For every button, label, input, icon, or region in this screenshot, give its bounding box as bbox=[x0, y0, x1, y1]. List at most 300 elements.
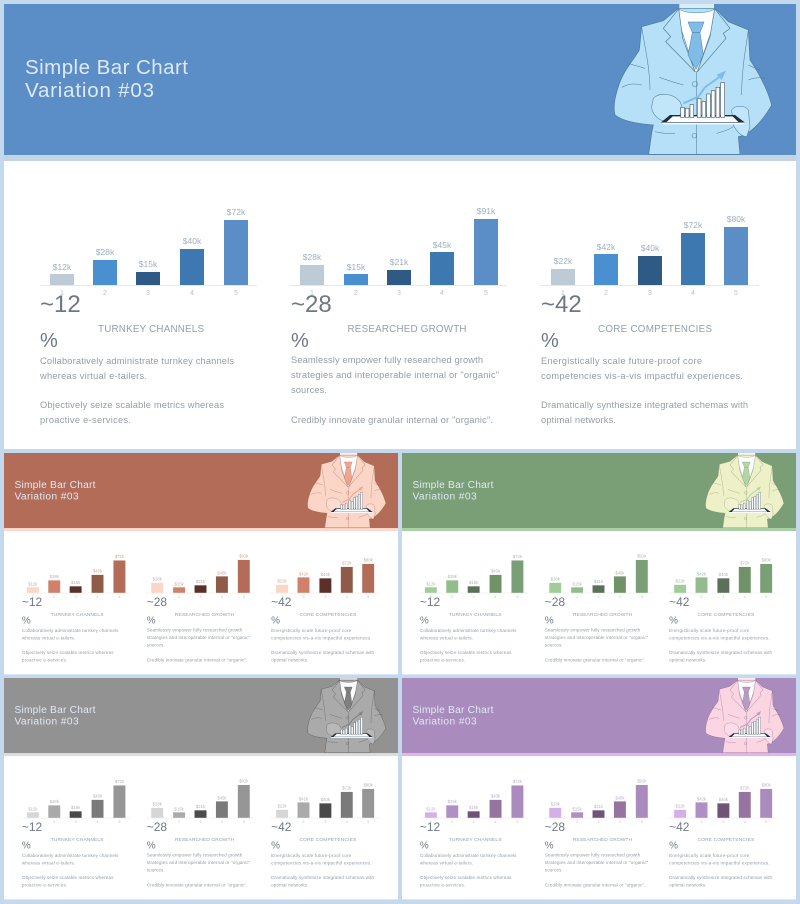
stat bbox=[291, 291, 332, 352]
bar chart: 3 bbox=[200, 820, 202, 824]
header banner bbox=[402, 453, 796, 528]
bar chart: $28k bbox=[50, 574, 60, 579]
bar chart: 3 bbox=[598, 595, 600, 599]
column: turnkey channels bbox=[39, 207, 257, 425]
content background bbox=[4, 756, 398, 899]
title: Simple Bar Chart bbox=[14, 705, 96, 716]
bar chart: $15k bbox=[175, 806, 185, 811]
bar chart: $15k bbox=[469, 805, 479, 810]
bar chart: 4 bbox=[619, 595, 621, 599]
bar chart: $40k bbox=[491, 793, 501, 798]
heading: RESEARCHED GROWTH bbox=[348, 324, 466, 335]
bar chart: $40k bbox=[321, 797, 331, 802]
bar chart: 1 bbox=[60, 290, 64, 297]
bar chart: 4 bbox=[691, 290, 695, 297]
stat bbox=[420, 595, 441, 627]
bar chart: $12k bbox=[28, 806, 38, 811]
bar chart: $15k bbox=[573, 581, 583, 586]
text block: Credibly innovate granular internal or "organic". bbox=[545, 882, 645, 887]
text block: Credibly innovate granular internal or "organic". bbox=[147, 657, 247, 662]
title bbox=[412, 480, 494, 502]
text block: optimal networks. bbox=[271, 657, 308, 662]
text block bbox=[147, 853, 251, 887]
text block: sources. bbox=[147, 868, 165, 873]
text block: sources. bbox=[545, 643, 563, 648]
header banner bbox=[402, 678, 796, 753]
bar chart: 3 bbox=[75, 820, 77, 824]
text block: Credibly innovate granular internal or "organic". bbox=[545, 657, 645, 662]
text block: Dramatically synthesize integrated schemas with bbox=[669, 875, 773, 880]
heading: TURNKEY CHANNELS bbox=[51, 612, 104, 618]
bar chart: $22k bbox=[278, 803, 288, 808]
bar chart: 3 bbox=[397, 290, 401, 297]
bar chart: 1 bbox=[32, 595, 34, 599]
text block: sources. bbox=[545, 868, 563, 873]
column: core competencies bbox=[271, 557, 380, 662]
bar chart: $91k bbox=[637, 553, 647, 558]
text block: Credibly innovate granular internal or "organic". bbox=[291, 415, 493, 425]
text block: competencies vis-a-vis impactful experiences. bbox=[541, 371, 743, 381]
text block: sources. bbox=[291, 385, 327, 395]
bar chart: 2 bbox=[178, 595, 180, 599]
bar chart: 3 bbox=[324, 595, 326, 599]
bar chart bbox=[669, 557, 778, 599]
bar chart: $91k bbox=[239, 778, 249, 783]
bar chart: 2 bbox=[53, 595, 55, 599]
stat bbox=[147, 820, 167, 852]
bar chart: 1 bbox=[679, 820, 681, 824]
icon: businessman holding tablet chart bbox=[706, 678, 784, 753]
text block bbox=[39, 356, 234, 425]
bar chart: 3 bbox=[473, 820, 475, 824]
text block: proactive e-services. bbox=[420, 882, 465, 887]
heading: RESEARCHED GROWTH bbox=[175, 837, 235, 843]
text block: Seamlessly empower fully researched growth bbox=[147, 853, 243, 858]
bar chart: $28k bbox=[50, 799, 60, 804]
bar chart: 4 bbox=[495, 595, 497, 599]
stat: ~12 bbox=[40, 291, 81, 318]
bar chart: $22k bbox=[554, 256, 573, 266]
column: core competencies bbox=[540, 214, 759, 425]
bar chart: 2 bbox=[604, 290, 608, 297]
bar chart: 2 bbox=[303, 595, 305, 599]
header strip bbox=[402, 753, 796, 756]
bar chart: 2 bbox=[53, 820, 55, 824]
bar chart bbox=[290, 206, 507, 297]
bar chart: $12k bbox=[53, 262, 72, 272]
text block: competencies vis-a-vis impactful experiences. bbox=[669, 861, 770, 866]
bar chart bbox=[544, 778, 652, 824]
column: core competencies bbox=[271, 782, 380, 887]
text block: Seamlessly empower fully researched growth bbox=[545, 628, 641, 633]
content background bbox=[402, 756, 796, 899]
bar chart: $15k bbox=[139, 259, 158, 269]
text block bbox=[420, 628, 517, 662]
text block: Energistically scale future-proof core bbox=[669, 853, 750, 858]
bar chart: $15k bbox=[175, 581, 185, 586]
text block bbox=[669, 853, 773, 887]
bar chart: 1 bbox=[281, 595, 283, 599]
column: turnkey channels bbox=[22, 554, 130, 662]
header banner bbox=[4, 678, 398, 753]
stat: ~42 bbox=[669, 820, 690, 834]
bar chart: $42k bbox=[299, 571, 309, 576]
title: Simple Bar Chart bbox=[25, 56, 188, 79]
heading: RESEARCHED GROWTH bbox=[573, 612, 633, 618]
bar chart: $80k bbox=[364, 782, 374, 787]
bar chart: $40k bbox=[641, 243, 660, 253]
bar chart: $72k bbox=[684, 220, 703, 230]
bar chart: $42k bbox=[597, 242, 616, 252]
text block: Dramatically synthesize integrated schemas with bbox=[669, 650, 773, 655]
column: turnkey channels bbox=[420, 779, 528, 887]
bar chart: $12k bbox=[28, 581, 38, 586]
bar chart: $40k bbox=[719, 572, 729, 577]
title: Variation #03 bbox=[14, 716, 79, 727]
stat bbox=[271, 820, 292, 852]
text block: strategies and interoperable internal or "organic" bbox=[545, 860, 649, 865]
bar chart: 5 bbox=[516, 820, 518, 824]
stat bbox=[541, 291, 582, 352]
bar chart: 1 bbox=[679, 595, 681, 599]
heading: TURNKEY CHANNELS bbox=[449, 612, 502, 618]
bar chart: 4 bbox=[97, 595, 99, 599]
text block: competencies vis-a-vis impactful experiences. bbox=[271, 636, 372, 641]
bar chart: 1 bbox=[430, 595, 432, 599]
text block bbox=[545, 628, 649, 662]
column: core competencies bbox=[669, 557, 778, 662]
text block bbox=[545, 853, 649, 887]
bar chart: $28k bbox=[551, 576, 561, 581]
bar chart: $72k bbox=[342, 560, 352, 565]
stat: ~28 bbox=[545, 820, 565, 834]
bar chart: $21k bbox=[196, 804, 206, 809]
text block: Energistically scale future-proof core bbox=[271, 853, 352, 858]
bar chart bbox=[669, 782, 778, 824]
bar chart bbox=[146, 778, 254, 824]
text block: Collaboratively administrate turnkey channels bbox=[22, 853, 119, 858]
text block bbox=[271, 853, 375, 887]
bar chart: $28k bbox=[551, 801, 561, 806]
bar chart: $45k bbox=[433, 240, 452, 250]
text block bbox=[541, 356, 748, 425]
bar chart: 1 bbox=[554, 820, 556, 824]
bar chart: $80k bbox=[364, 557, 374, 562]
bar chart: $72k bbox=[342, 785, 352, 790]
stat: ~28 bbox=[545, 595, 565, 609]
bar chart: $72k bbox=[513, 554, 523, 559]
text block bbox=[22, 853, 119, 887]
text block: optimal networks. bbox=[271, 882, 308, 887]
text block: proactive e-services. bbox=[22, 882, 67, 887]
bar chart: $21k bbox=[594, 804, 604, 809]
heading: TURNKEY CHANNELS bbox=[98, 324, 204, 335]
bar chart: $15k bbox=[573, 806, 583, 811]
heading: TURNKEY CHANNELS bbox=[449, 837, 502, 843]
title bbox=[412, 705, 494, 727]
bar chart: 3 bbox=[722, 595, 724, 599]
bar chart: 4 bbox=[221, 820, 223, 824]
text block: strategies and interoperable internal or "organic" bbox=[545, 635, 649, 640]
column: turnkey channels bbox=[420, 554, 528, 662]
bar chart: 5 bbox=[234, 290, 238, 297]
bar chart: 4 bbox=[495, 820, 497, 824]
heading: TURNKEY CHANNELS bbox=[51, 837, 104, 843]
bar chart bbox=[146, 553, 254, 599]
text block bbox=[22, 628, 119, 662]
bar chart: 5 bbox=[765, 595, 767, 599]
bar chart: $80k bbox=[762, 782, 772, 787]
bar chart: $72k bbox=[740, 560, 750, 565]
stat: % bbox=[420, 841, 429, 852]
bar chart: 1 bbox=[156, 595, 158, 599]
stat: % bbox=[40, 330, 58, 352]
text block: competencies vis-a-vis impactful experiences. bbox=[669, 636, 770, 641]
bar chart: 3 bbox=[75, 595, 77, 599]
bar chart: $72k bbox=[115, 779, 125, 784]
bar chart: 2 bbox=[103, 290, 107, 297]
title: Simple Bar Chart bbox=[412, 480, 494, 491]
stat: ~28 bbox=[147, 595, 167, 609]
text block: Credibly innovate granular internal or "organic". bbox=[147, 882, 247, 887]
text block: whereas virtual e-tailers. bbox=[420, 861, 473, 866]
stat: ~42 bbox=[271, 595, 292, 609]
bar chart: 4 bbox=[440, 290, 444, 297]
stat bbox=[669, 820, 690, 852]
bar chart bbox=[544, 553, 652, 599]
stat: ~28 bbox=[291, 291, 332, 318]
column: researched growth bbox=[146, 778, 254, 887]
bar chart: $28k bbox=[448, 799, 458, 804]
icon: businessman holding tablet chart bbox=[308, 678, 386, 753]
bar chart: $45k bbox=[615, 795, 625, 800]
stat: % bbox=[669, 841, 678, 852]
stat bbox=[420, 820, 441, 852]
bar chart: 1 bbox=[554, 595, 556, 599]
bar chart: 1 bbox=[32, 820, 34, 824]
bar chart: $15k bbox=[347, 262, 366, 272]
bar chart bbox=[22, 554, 130, 599]
title bbox=[14, 480, 96, 502]
heading: CORE COMPETENCIES bbox=[698, 612, 755, 618]
bar chart: $72k bbox=[513, 779, 523, 784]
bar chart: $12k bbox=[426, 581, 436, 586]
bar chart: 3 bbox=[146, 290, 150, 297]
bar chart: 4 bbox=[97, 820, 99, 824]
text block: Seamlessly empower fully researched growth bbox=[291, 355, 483, 365]
bar chart: $40k bbox=[491, 568, 501, 573]
column: turnkey channels bbox=[22, 779, 130, 887]
header strip bbox=[4, 155, 796, 161]
header banner bbox=[4, 453, 398, 528]
text block: strategies and interoperable internal or "organic" bbox=[147, 635, 251, 640]
heading: RESEARCHED GROWTH bbox=[573, 837, 633, 843]
bar chart: $28k bbox=[303, 252, 322, 262]
column: core competencies bbox=[669, 782, 778, 887]
bar chart: 2 bbox=[354, 290, 358, 297]
bar chart: 1 bbox=[430, 820, 432, 824]
bar chart: 5 bbox=[516, 595, 518, 599]
bar chart: 2 bbox=[701, 595, 703, 599]
stat bbox=[669, 595, 690, 627]
bar chart: 4 bbox=[346, 820, 348, 824]
text block: Collaboratively administrate turnkey channels bbox=[420, 628, 517, 633]
header strip bbox=[402, 528, 796, 531]
panel: blue main slide bbox=[4, 4, 796, 449]
bar chart: 3 bbox=[200, 595, 202, 599]
content background bbox=[4, 161, 796, 449]
bar chart: 4 bbox=[221, 595, 223, 599]
stat: % bbox=[545, 616, 554, 627]
heading: RESEARCHED GROWTH bbox=[175, 612, 235, 618]
panel: green variation bbox=[402, 453, 796, 674]
text block bbox=[147, 628, 251, 662]
header banner bbox=[4, 4, 796, 155]
bar chart: 4 bbox=[744, 820, 746, 824]
bar chart: 5 bbox=[118, 595, 120, 599]
bar chart: 5 bbox=[641, 820, 643, 824]
text block: strategies and interoperable internal or "organic" bbox=[147, 860, 251, 865]
text block: whereas virtual e-tailers. bbox=[22, 861, 75, 866]
stat: ~12 bbox=[22, 595, 43, 609]
text block: optimal networks. bbox=[669, 657, 706, 662]
stat: % bbox=[271, 616, 280, 627]
bar chart: 5 bbox=[367, 820, 369, 824]
bar chart: 2 bbox=[303, 820, 305, 824]
stat: % bbox=[147, 616, 156, 627]
bar chart: $22k bbox=[278, 578, 288, 583]
bar chart: 5 bbox=[118, 820, 120, 824]
text block: Objectively seize scalable metrics whereas bbox=[420, 875, 512, 880]
title: Variation #03 bbox=[25, 79, 154, 102]
bar chart: $15k bbox=[71, 805, 81, 810]
bar chart: $22k bbox=[676, 803, 686, 808]
stat bbox=[22, 595, 43, 627]
bar chart: $21k bbox=[196, 579, 206, 584]
bar chart: $21k bbox=[594, 579, 604, 584]
text block: proactive e-services. bbox=[22, 657, 67, 662]
text block bbox=[291, 355, 499, 425]
text block: optimal networks. bbox=[541, 415, 616, 425]
bar chart bbox=[40, 207, 257, 297]
bar chart: $22k bbox=[676, 578, 686, 583]
bar chart: $21k bbox=[390, 257, 409, 267]
column: researched growth bbox=[544, 778, 652, 887]
panel: purple variation bbox=[402, 678, 796, 899]
text block: Objectively seize scalable metrics whereas bbox=[22, 650, 114, 655]
text block: proactive e-services. bbox=[40, 415, 131, 425]
bar chart: $42k bbox=[299, 796, 309, 801]
stat: % bbox=[669, 616, 678, 627]
text block bbox=[669, 628, 773, 662]
bar chart: $15k bbox=[469, 580, 479, 585]
stat: % bbox=[271, 841, 280, 852]
text block: Collaboratively administrate turnkey channels bbox=[22, 628, 119, 633]
stat bbox=[545, 820, 565, 852]
content background bbox=[4, 531, 398, 674]
text block: whereas virtual e-tailers. bbox=[420, 636, 473, 641]
text block: Dramatically synthesize integrated schemas with bbox=[271, 875, 375, 880]
bar chart: 5 bbox=[367, 595, 369, 599]
bar chart: 4 bbox=[190, 290, 194, 297]
bar chart: $72k bbox=[227, 207, 246, 217]
bar chart: $40k bbox=[93, 793, 103, 798]
bar chart: 2 bbox=[451, 595, 453, 599]
text block: Collaboratively administrate turnkey channels bbox=[420, 853, 517, 858]
text block: Dramatically synthesize integrated schemas with bbox=[271, 650, 375, 655]
title: Variation #03 bbox=[412, 491, 477, 502]
bar chart: $12k bbox=[426, 806, 436, 811]
text block: sources. bbox=[147, 643, 165, 648]
bar chart: 5 bbox=[765, 820, 767, 824]
stat: % bbox=[22, 616, 31, 627]
stat bbox=[545, 595, 565, 627]
text block: Collaboratively administrate turnkey channels bbox=[40, 356, 234, 366]
bar chart bbox=[22, 779, 130, 824]
bar chart: 1 bbox=[561, 290, 565, 297]
text block: strategies and interoperable internal or "organic" bbox=[291, 370, 499, 380]
text block: competencies vis-a-vis impactful experiences. bbox=[271, 861, 372, 866]
bar chart bbox=[420, 554, 528, 599]
stat: ~42 bbox=[669, 595, 690, 609]
content background bbox=[402, 531, 796, 674]
bar chart: $72k bbox=[115, 554, 125, 559]
bar chart: 2 bbox=[576, 595, 578, 599]
panel: brown variation bbox=[4, 453, 398, 674]
bar chart: 2 bbox=[701, 820, 703, 824]
column: researched growth bbox=[290, 206, 507, 425]
bar chart: $15k bbox=[71, 580, 81, 585]
bar chart: 1 bbox=[281, 820, 283, 824]
bar chart: 3 bbox=[598, 820, 600, 824]
stat bbox=[40, 291, 81, 352]
bar chart: $45k bbox=[217, 795, 227, 800]
text block: whereas virtual e-tailers. bbox=[22, 636, 75, 641]
stat: ~42 bbox=[541, 291, 582, 318]
header strip bbox=[4, 528, 398, 531]
text block: Objectively seize scalable metrics whereas bbox=[420, 650, 512, 655]
stat: ~12 bbox=[22, 820, 43, 834]
panel: gray variation bbox=[4, 678, 398, 899]
text block: Dramatically synthesize integrated schemas with bbox=[541, 400, 748, 410]
bar chart: 5 bbox=[734, 290, 738, 297]
column: researched growth bbox=[146, 553, 254, 662]
stat: % bbox=[291, 330, 309, 352]
title: Variation #03 bbox=[14, 491, 79, 502]
bar chart bbox=[540, 214, 759, 297]
stat bbox=[271, 595, 292, 627]
stat: % bbox=[545, 841, 554, 852]
stat: ~12 bbox=[420, 595, 441, 609]
stat: % bbox=[420, 616, 429, 627]
bar chart: 5 bbox=[641, 595, 643, 599]
bar chart bbox=[271, 557, 380, 599]
heading: CORE COMPETENCIES bbox=[698, 837, 755, 843]
text block: whereas virtual e-tailers. bbox=[39, 371, 147, 381]
stat: ~28 bbox=[147, 820, 167, 834]
bar chart bbox=[420, 779, 528, 824]
bar chart: 3 bbox=[722, 820, 724, 824]
stat bbox=[147, 595, 167, 627]
stat: ~12 bbox=[420, 820, 441, 834]
stat: % bbox=[22, 841, 31, 852]
bar chart: $42k bbox=[697, 796, 707, 801]
text block bbox=[420, 853, 517, 887]
bar chart: $72k bbox=[740, 785, 750, 790]
bar chart: 2 bbox=[451, 820, 453, 824]
bar chart: $80k bbox=[727, 214, 746, 224]
bar chart: $91k bbox=[637, 778, 647, 783]
